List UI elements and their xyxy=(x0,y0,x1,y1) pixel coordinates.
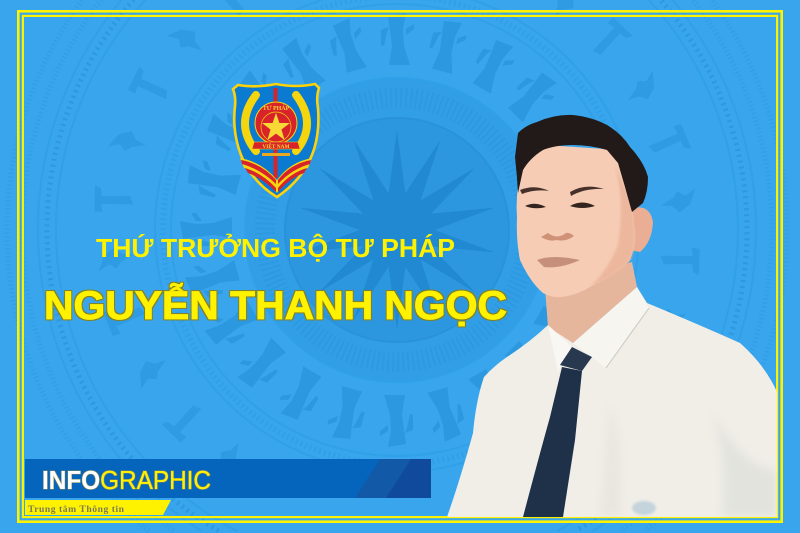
nose xyxy=(541,233,574,241)
emblem: Tư pháp shield xyxy=(233,84,319,197)
eyes xyxy=(525,202,595,208)
shirt xyxy=(447,287,777,517)
gold star xyxy=(262,113,290,140)
collar xyxy=(548,287,649,372)
face shading xyxy=(590,165,635,287)
face xyxy=(517,145,635,297)
tie xyxy=(523,347,592,517)
pocket mark xyxy=(632,501,656,515)
banner: infographic xyxy=(25,459,431,498)
shield xyxy=(233,84,319,197)
eyebrows xyxy=(520,187,604,196)
neck xyxy=(545,262,637,343)
drum figures: birds xyxy=(92,0,702,484)
banner title: INFOGRAPHIC xyxy=(42,465,211,495)
source tag: Trung tâm Thông tin xyxy=(28,504,125,515)
heading: name: NGUYỄN THANH NGỌC xyxy=(44,284,507,328)
drum star xyxy=(298,130,496,330)
hair xyxy=(515,115,648,212)
portrait xyxy=(447,115,777,517)
open book wings xyxy=(240,158,312,193)
motto top: TƯ PHÁP xyxy=(263,104,290,112)
shirt shading xyxy=(607,434,776,516)
ribbon: VIỆT NAM xyxy=(262,142,290,150)
mouth xyxy=(537,257,580,267)
red medallion xyxy=(255,102,297,144)
drum figures: dancers xyxy=(180,13,614,447)
ear xyxy=(630,207,653,252)
source tag xyxy=(25,500,171,515)
sword xyxy=(262,88,290,178)
heading: position: THỨ TRƯỞNG BỘ TƯ PHÁP xyxy=(96,233,455,263)
wreath xyxy=(245,95,307,151)
